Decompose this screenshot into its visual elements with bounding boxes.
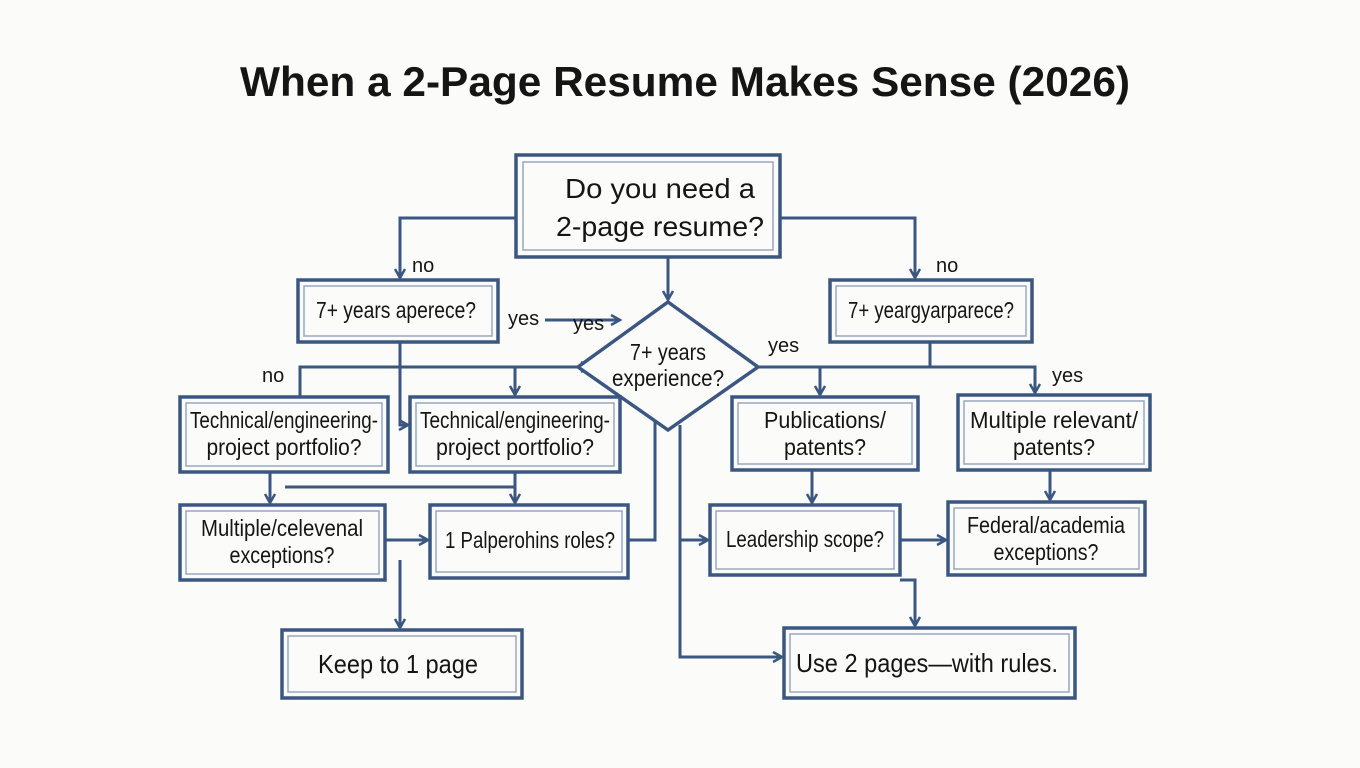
box: start question	[516, 155, 780, 257]
diamond: 7+ years experience: experience?	[612, 365, 724, 391]
box: roles	[430, 505, 628, 578]
box: use 2 pages: Use 2 pages—with rules.	[796, 648, 1058, 678]
title: When a 2-Page Resume Makes Sense (2026)	[240, 58, 1130, 105]
box: start question: 2-page resume?	[556, 211, 764, 242]
connectors	[270, 218, 1050, 657]
box: left experience	[298, 280, 498, 342]
labels: yes/no: yes	[573, 313, 604, 335]
box: technical portfolio 1	[180, 397, 388, 472]
box: publications: Publications/	[764, 407, 887, 433]
box: leadership: Leadership scope?	[726, 526, 884, 552]
box: start question: Do you need a	[565, 173, 755, 204]
box: use 2 pages	[784, 628, 1075, 698]
box: multiple relevant: patents?	[1013, 434, 1095, 460]
labels: yes/no: no	[936, 255, 958, 277]
box: left experience: 7+ years aperece?	[316, 297, 476, 323]
box: technical portfolio 2: Technical/engineering-	[420, 407, 610, 433]
labels: yes/no: yes	[508, 308, 539, 330]
box: multiple exceptions: exceptions?	[230, 542, 334, 568]
labels: yes/no	[262, 255, 1083, 387]
box: leadership	[710, 505, 900, 575]
box: technical portfolio 2	[410, 397, 620, 472]
box: technical portfolio 1: project portfolio?	[206, 434, 362, 460]
box: right experience: 7+ yeargyarparece?	[848, 297, 1014, 323]
labels: yes/no: yes	[1052, 365, 1083, 387]
box: multiple exceptions	[180, 505, 385, 580]
box: right experience	[830, 280, 1032, 342]
box: multiple relevant	[958, 395, 1150, 470]
box: multiple exceptions: Multiple/celevenal	[201, 515, 363, 541]
box: keep to 1 page: Keep to 1 page	[318, 649, 478, 679]
box: roles: 1 Palperohins roles?	[445, 527, 615, 553]
box: technical portfolio 1: Technical/engineering-	[190, 407, 378, 433]
box: multiple relevant: Multiple relevant/	[970, 407, 1139, 433]
diamond: 7+ years experience: 7+ years	[630, 339, 706, 365]
box: federal/academia: exceptions?	[994, 539, 1098, 565]
box: technical portfolio 2: project portfolio?	[436, 434, 594, 460]
box: federal/academia: Federal/academia	[967, 512, 1125, 538]
box: federal/academia	[948, 502, 1145, 575]
diamond: 7+ years experience	[578, 302, 758, 430]
box: publications: patents?	[784, 434, 866, 460]
labels: yes/no: no	[412, 255, 434, 277]
labels: yes/no: yes	[768, 335, 799, 357]
box: publications	[732, 397, 918, 470]
labels: yes/no: no	[262, 365, 284, 387]
box: keep to 1 page	[282, 630, 522, 698]
